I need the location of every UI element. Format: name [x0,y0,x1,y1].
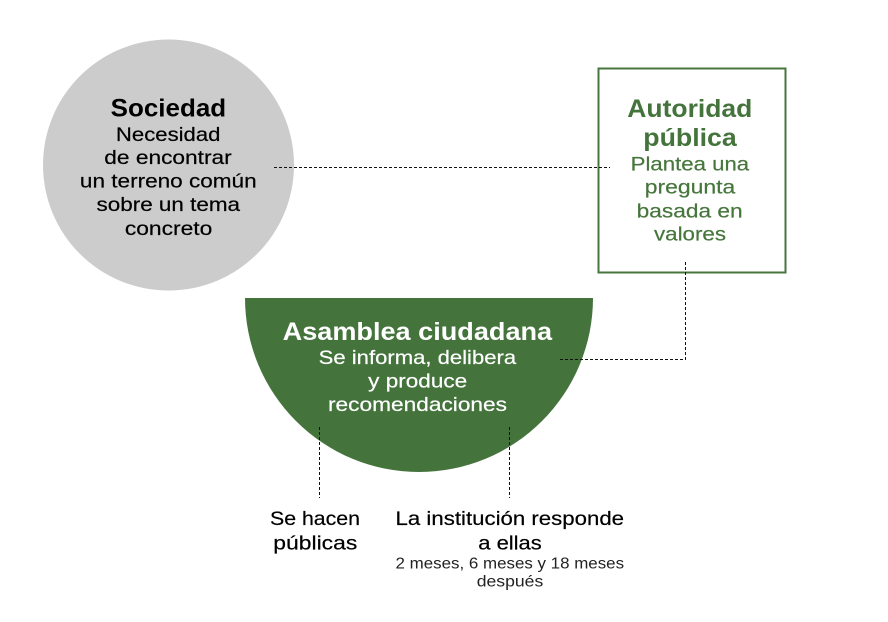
heading: Autoridad pública: Autoridad [627,95,752,123]
text: plazos de respuesta [396,555,624,591]
text: plazos de respuesta: 2 meses, 6 meses y 18 meses [396,555,624,572]
text: se hacen públicas: Se hacen [270,508,360,530]
heading: Asamblea ciudadana: Asamblea ciudadana [283,318,553,346]
text: autoridad description: valores [654,223,726,245]
heading: Sociedad: Sociedad [111,94,226,122]
panel: asamblea ciudadana semicircle [245,298,593,472]
arrow: dotted connector to la institución responde [508,427,510,498]
text: asamblea description [319,347,516,416]
text: plazos de respuesta: después [477,574,544,591]
heading: Autoridad pública: pública [643,124,738,152]
text: asamblea description: Se informa, delibera [319,347,516,369]
text: sociedad description: de encontrar [104,147,232,169]
text: sociedad description [80,124,257,240]
text: autoridad description: Plantea una [631,154,749,176]
text: sociedad description: sobre un tema [97,194,240,216]
arrow: dotted connector autoridad to asamblea [558,262,686,360]
text: la institución responde [396,508,624,591]
text: se hacen públicas: públicas [273,532,358,554]
text: asamblea description: recomendaciones [328,394,507,416]
text: sociedad description: un terreno común [80,171,257,193]
text: sociedad description: concreto [125,218,213,240]
text: autoridad description [631,154,749,245]
arrow: dotted connector sociedad to autoridad [274,166,610,168]
text: autoridad description: basada en [637,200,743,222]
text: la institución responde: La institución responde [396,508,624,530]
panel: sociedad circle [43,40,294,290]
text: sociedad description: Necesidad [116,124,220,146]
heading: Autoridad pública [627,95,752,152]
text: la institución responde: a ellas [478,532,542,554]
text: se hacen públicas [270,508,360,554]
text: asamblea description: y produce [368,370,467,392]
text: autoridad description: pregunta [645,176,735,198]
arrow: dotted connector to se hacen públicas [318,427,320,498]
panel: autoridad pública box [598,68,786,272]
